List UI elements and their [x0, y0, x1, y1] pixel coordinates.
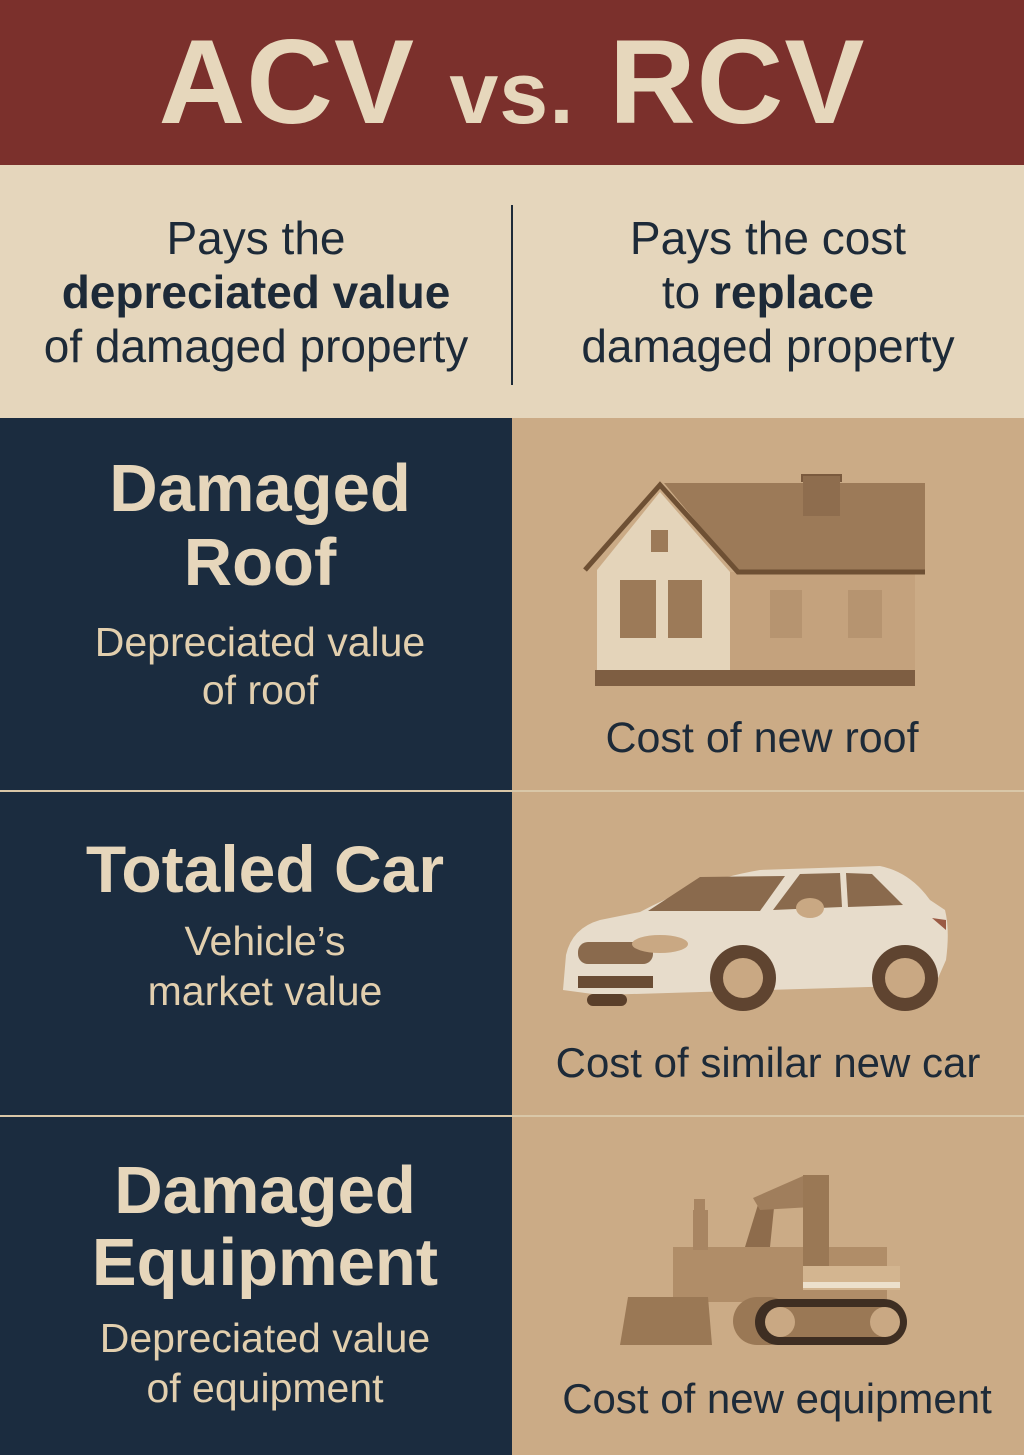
RCV definition — [581, 212, 955, 372]
row 3: damaged equipment ACV: Depreciated value — [100, 1315, 430, 1361]
RCV definition: Pays the cost — [630, 212, 906, 264]
RCV car caption: Cost of similar new car — [556, 1039, 980, 1086]
title banner — [0, 0, 1024, 165]
left column navy — [0, 418, 512, 1455]
definitions panel — [0, 165, 1024, 418]
RCV equipment caption: Cost of new equipment — [562, 1375, 992, 1422]
row 1: damaged roof ACV: Depreciated value — [95, 619, 425, 665]
title: ACV vs. RCV — [159, 15, 865, 149]
ACV definition: depreciated value — [62, 266, 450, 318]
RCV roof caption: Cost of new roof — [605, 714, 919, 762]
row 2: totaled car ACV: Totaled Car — [86, 832, 444, 906]
RCV definition: damaged property — [581, 320, 955, 372]
row 1: damaged roof ACV — [95, 451, 425, 713]
ACV definition: Pays the — [166, 212, 346, 264]
row 2: totaled car ACV — [86, 832, 444, 1014]
ACV definition: of damaged property — [44, 320, 468, 372]
row 1: damaged roof ACV: Roof — [184, 525, 336, 600]
row 3: damaged equipment ACV: Damaged — [114, 1153, 416, 1228]
row 3: damaged equipment ACV — [92, 1153, 438, 1411]
row 1: damaged roof ACV: Damaged — [109, 451, 411, 526]
ACV definition — [44, 212, 468, 372]
row 3: damaged equipment ACV: Equipment — [92, 1225, 438, 1300]
RCV definition: to replace — [662, 266, 874, 318]
row 1: damaged roof ACV: of roof — [202, 667, 318, 713]
row 2: totaled car ACV: market value — [148, 968, 382, 1014]
row 2: totaled car ACV: Vehicle’s — [184, 918, 346, 964]
row 3: damaged equipment ACV: of equipment — [146, 1365, 384, 1411]
